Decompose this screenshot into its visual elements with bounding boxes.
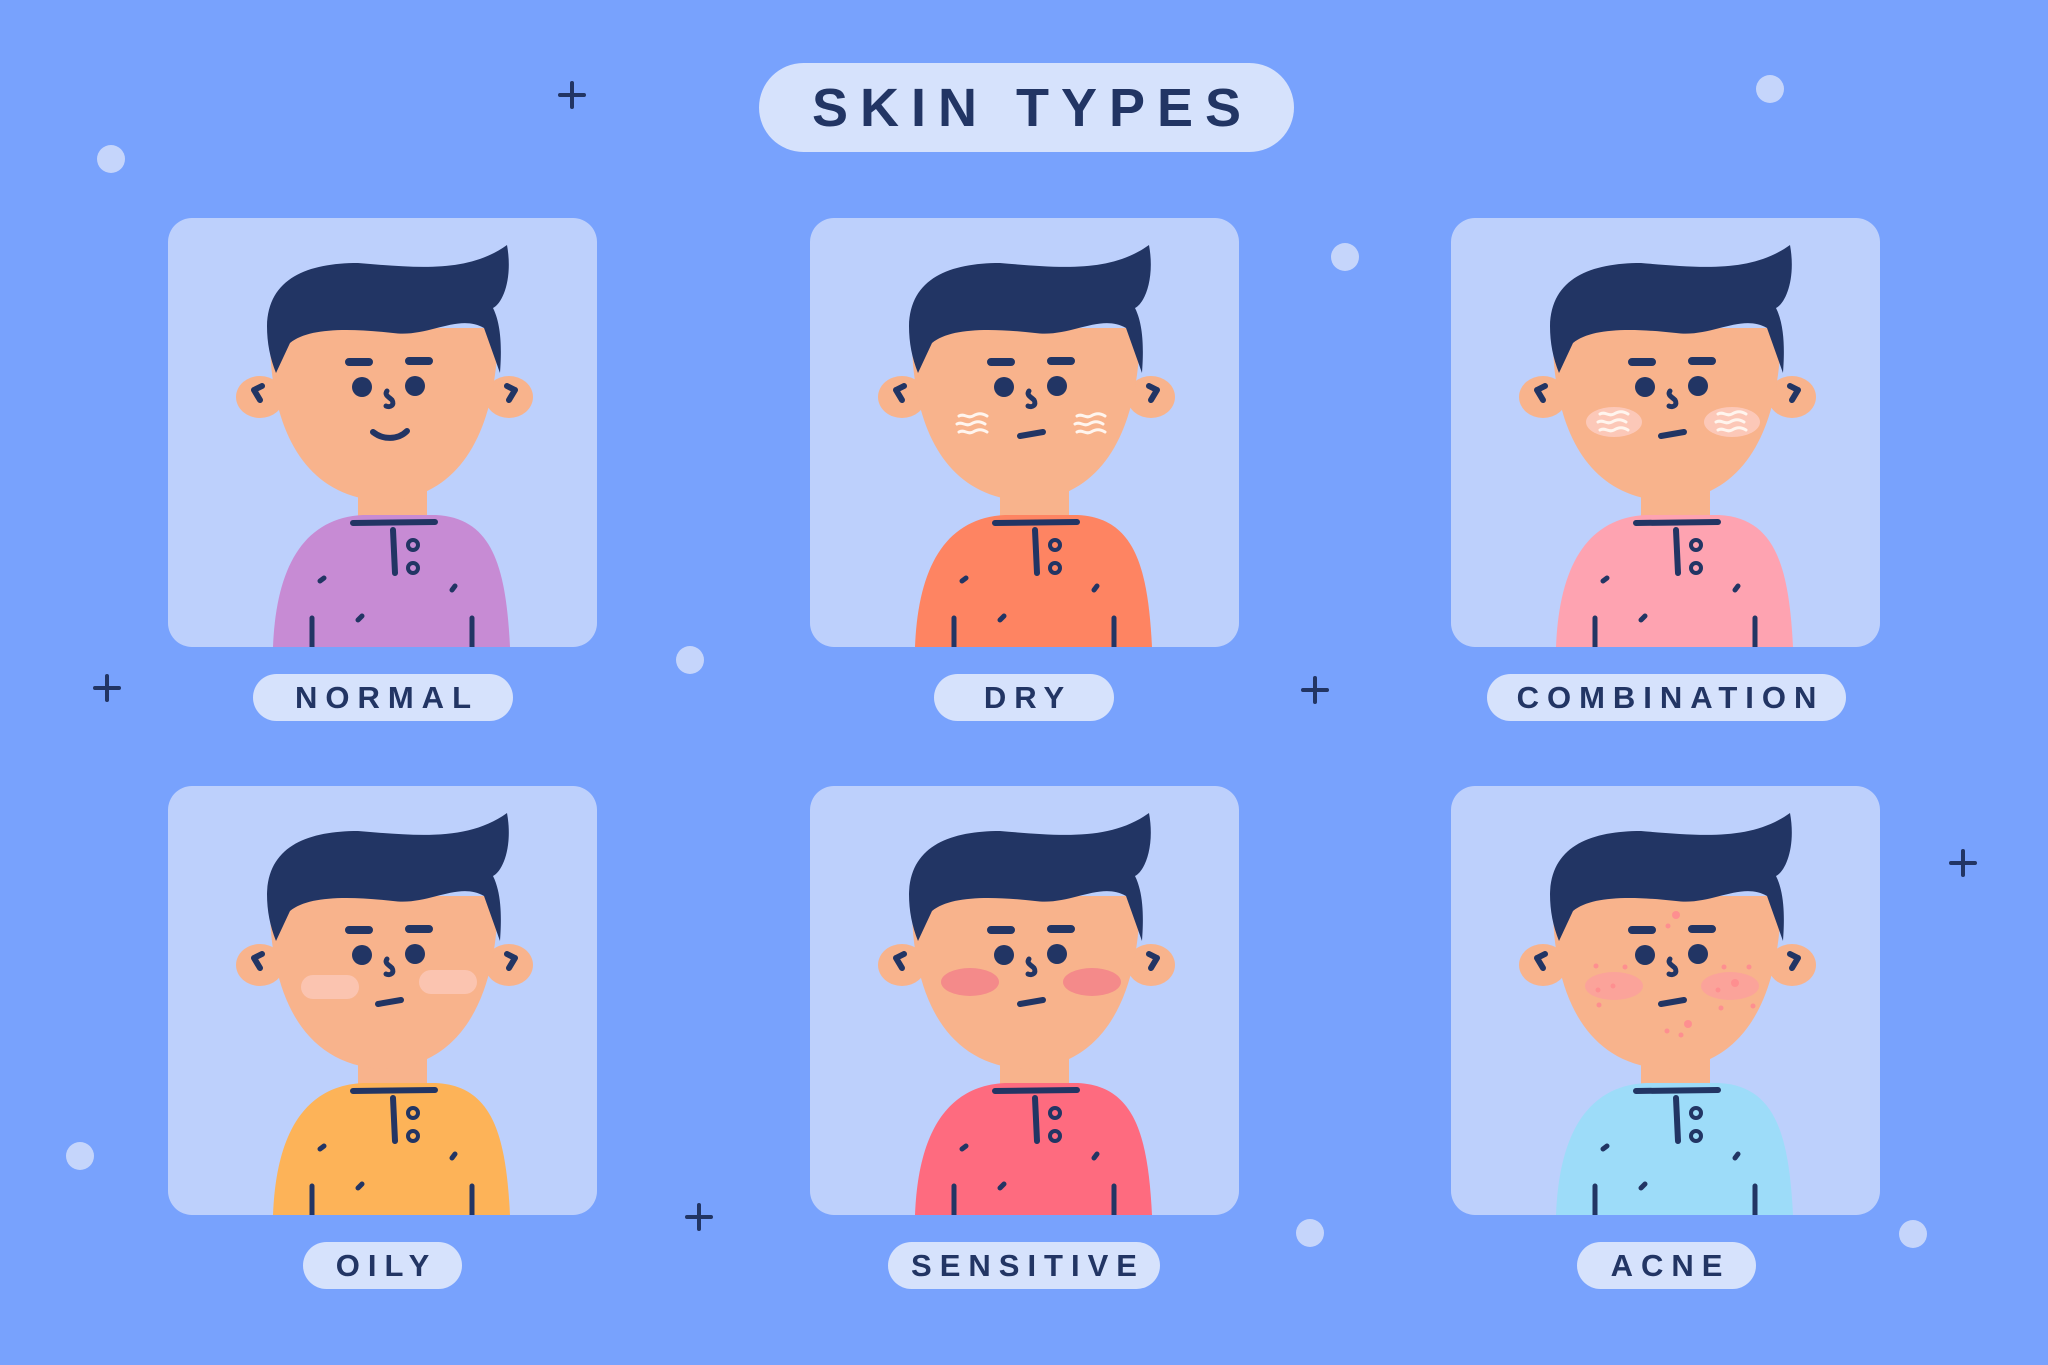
label: sensitive xyxy=(888,1242,1160,1289)
panel: combination xyxy=(1451,218,1880,647)
title xyxy=(759,63,1294,152)
panel: sensitive xyxy=(810,786,1239,1215)
label: normal xyxy=(253,674,513,721)
label: oily xyxy=(303,1242,462,1289)
smile xyxy=(373,431,407,438)
label: dry: DRY xyxy=(984,680,1072,714)
label: sensitive: SENSITIVE xyxy=(911,1248,1145,1282)
panel: oily xyxy=(168,786,597,1215)
panel: normal xyxy=(168,218,597,647)
panel: acne xyxy=(1451,786,1880,1215)
label: acne xyxy=(1577,1242,1756,1289)
label: dry xyxy=(934,674,1114,721)
panel: dry xyxy=(810,218,1239,647)
label: combination xyxy=(1487,674,1846,721)
label: oily: OILY xyxy=(336,1248,437,1282)
label: acne: ACNE xyxy=(1611,1248,1730,1282)
title: SKIN TYPES xyxy=(812,78,1253,138)
label: combination: COMBINATION xyxy=(1517,680,1824,714)
label: normal: NORMAL xyxy=(295,680,479,714)
